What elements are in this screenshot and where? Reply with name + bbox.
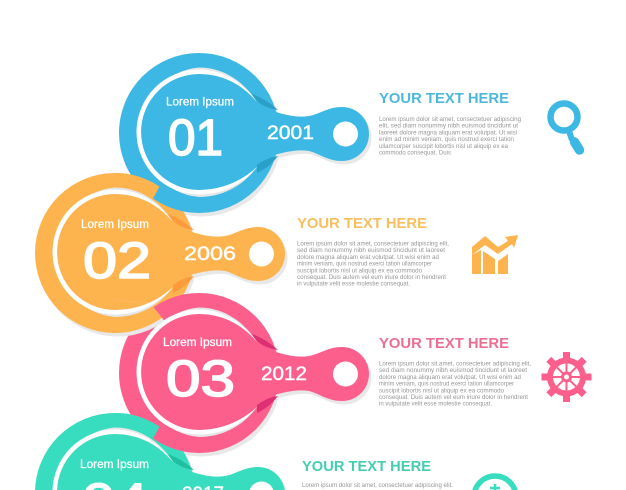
text block 02: dolore magna aliquam erat volutpat. Ut wisi enim ad	[297, 255, 439, 261]
text block 02	[297, 215, 449, 288]
disc labels 03: 03	[166, 350, 235, 407]
text block 02: YOUR TEXT HERE	[297, 215, 427, 232]
text block 02: in vulputate velit esse molestie consequat.	[297, 282, 410, 288]
disc 02 orange	[35, 173, 285, 333]
text block 03: YOUR TEXT HERE	[379, 335, 509, 352]
text block 03: Lorem ipsum dolor sit amet, consectetuer adipiscing elit,	[379, 362, 531, 368]
disc 03 pink	[119, 293, 369, 453]
icon: magnifying glass	[550, 104, 580, 150]
text block 01: enim ad minim veniam, quis nostrud exerci tation	[379, 137, 514, 143]
fold: orange over pink	[112, 300, 164, 336]
text block 01: elit, sed diam nonummy nibh euismod tincidunt ut	[379, 124, 518, 130]
icon: rising bar chart with arrow	[472, 235, 518, 274]
disc labels 02	[81, 219, 236, 289]
text block 03: sed diam nonummy nibh euismod tincidunt ut laoreet	[379, 368, 527, 374]
fold: orange over blue	[116, 173, 160, 203]
text block 01: ullamcorper suscipit lobortis nisl ut aliquip ex ea	[379, 144, 509, 150]
icon: teal coin	[474, 476, 516, 490]
text block 03: minim veniam, quis nostrud exerci tation ullamcorper	[379, 382, 514, 388]
text block 02: suscipit lobortis nisl ut aliquip ex ea commodo	[297, 268, 423, 274]
disc labels 04: Lorem Ipsum	[80, 459, 149, 471]
disc 01 blue	[119, 53, 369, 213]
text block 02: consequat. Duis autem vel eum iriure dolor in hendrerit	[297, 275, 446, 281]
disc labels 02: 02	[83, 232, 151, 289]
drop shadows of the discs	[37, 56, 371, 490]
text block 04	[302, 458, 453, 489]
text block 02: minim veniam, quis nostrud exerci tation ullamcorper	[297, 262, 432, 268]
text block 01: laoreet dolore magna aliquam erat volutpat. Ut wisi	[379, 130, 517, 136]
text block 01: commodo consequat. Duis	[379, 150, 451, 156]
text block 02: sed diam nonummy nibh euismod tincidunt ut laoreet	[297, 248, 445, 254]
text block 02: Lorem ipsum dolor sit amet, consectetuer adipiscing elit,	[297, 242, 449, 248]
disc labels 01	[166, 96, 314, 166]
disc labels 01: Lorem Ipsum	[166, 96, 234, 108]
text block 01: Lorem ipsum dolor sit amet, consectetuer adipiscing	[379, 117, 521, 123]
text block 03: dolore magna aliquam erat volutpat. Ut wisi enim ad	[379, 375, 521, 381]
text block 04: YOUR TEXT HERE	[302, 458, 431, 475]
disc 04 teal	[35, 413, 285, 490]
disc labels 03: 2012	[261, 364, 307, 385]
disc labels 02: Lorem Ipsum	[81, 219, 149, 231]
fold: teal over pink	[116, 413, 160, 443]
disc labels 03	[163, 337, 307, 407]
icon: gear wheel	[542, 352, 592, 402]
text block 03: consequat. Duis autem vel eum iriure dolor in hendrerit	[379, 395, 528, 401]
disc labels 01: 01	[168, 109, 223, 166]
disc labels 01: 2001	[267, 123, 314, 144]
text block 01	[379, 90, 521, 156]
disc labels 03: Lorem Ipsum	[163, 337, 232, 349]
text block 03: in vulputate velit esse molestie consequat.	[379, 402, 492, 408]
text block 03	[379, 335, 531, 408]
disc labels 04	[80, 459, 224, 490]
text block 04: Lorem ipsum dolor sit amet, consectetuer adipiscing elit.	[302, 483, 453, 489]
disc labels 02: 2006	[184, 244, 236, 265]
text block 03: suscipit lobortis nisl ut aliquip ex ea commodo	[379, 388, 505, 394]
text block 01: YOUR TEXT HERE	[379, 90, 509, 107]
